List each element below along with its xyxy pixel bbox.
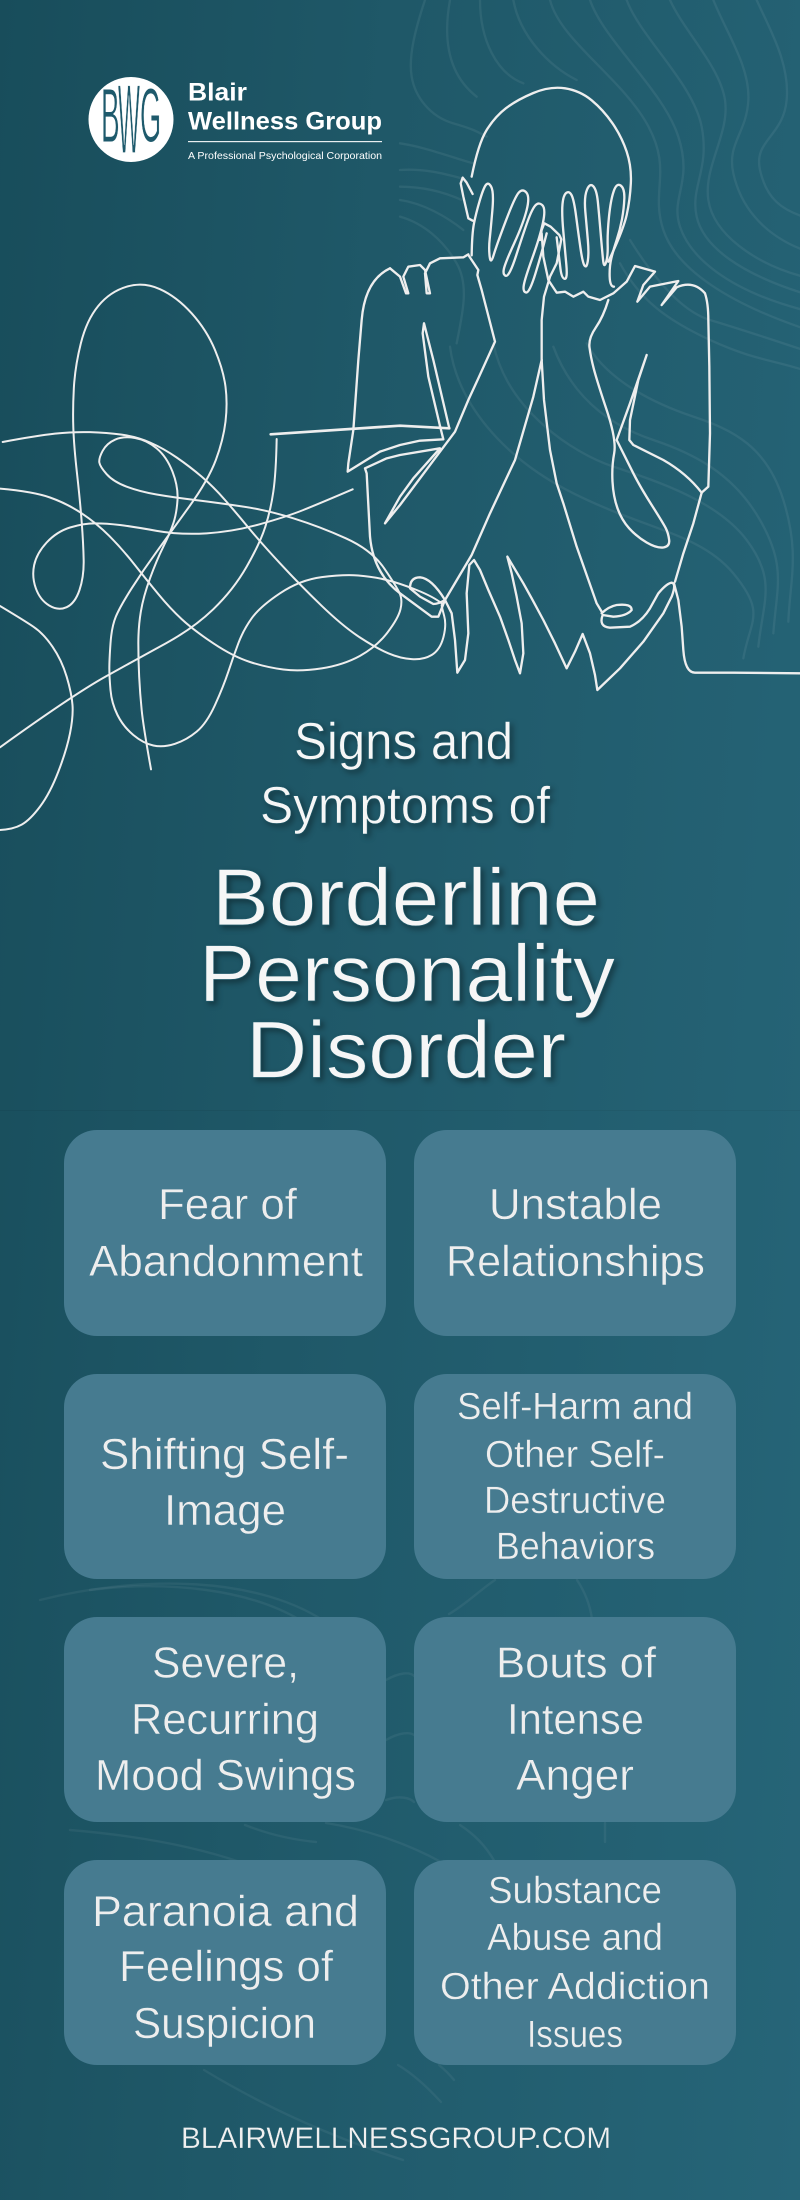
title: signs and symptoms of: [260, 713, 551, 835]
card: fear of abandonment: Fear of: [158, 1180, 298, 1229]
card: shifting self-image: Shifting Self-: [100, 1430, 349, 1479]
icon: BWG monogram: B: [101, 74, 120, 159]
card: severe recurring mood swings: [64, 1617, 386, 1822]
title: borderline personality disorder: Personality: [199, 929, 616, 1019]
card: fear of abandonment: Abandonment: [89, 1237, 363, 1286]
card: unstable relationships: [414, 1130, 736, 1336]
card: paranoia and feelings of suspicion: Feelings of: [119, 1942, 334, 1991]
card: substance abuse and other addiction issues: Issues: [527, 2014, 623, 2056]
card: unstable relationships: Unstable: [489, 1180, 662, 1229]
logo wordmark: Wellness Group: [188, 107, 382, 135]
title: borderline personality disorder: Borderline: [212, 853, 600, 943]
title: signs and symptoms of: Signs and: [294, 713, 513, 771]
card: paranoia and feelings of suspicion: [64, 1860, 386, 2065]
card: self-harm and other self-destructive behaviors: Destructive: [484, 1480, 666, 1522]
card: self-harm and other self-destructive behaviors: [414, 1374, 736, 1579]
title: borderline personality disorder: [199, 853, 616, 1096]
card: substance abuse and other addiction issues: [414, 1860, 736, 2065]
card: severe recurring mood swings: Recurring: [131, 1695, 319, 1744]
card: severe recurring mood swings: Mood Swings: [95, 1751, 356, 1800]
footer: website url: BLAIRWELLNESSGROUP.COM: [181, 2122, 611, 2155]
card: shifting self-image: Image: [164, 1486, 286, 1535]
card: substance abuse and other addiction issues: Other Addiction: [440, 1966, 710, 2008]
card: shifting self-image: [64, 1374, 386, 1579]
illustration: tangled line scribble: [0, 285, 445, 830]
card: bouts of intense anger: Anger: [516, 1751, 634, 1800]
title: signs and symptoms of: Symptoms of: [260, 777, 551, 835]
icon: BWG monogram: G: [140, 74, 161, 159]
card: fear of abandonment: [64, 1130, 386, 1336]
icon: BWG monogram: W: [118, 66, 140, 175]
card: self-harm and other self-destructive behaviors: Behaviors: [496, 1526, 655, 1568]
card: paranoia and feelings of suspicion: Suspicion: [133, 1999, 316, 2048]
background waves: top right: [400, 0, 800, 658]
card: bouts of intense anger: Intense: [507, 1695, 644, 1744]
card: bouts of intense anger: [414, 1617, 736, 1822]
card: paranoia and feelings of suspicion: Paranoia and: [92, 1887, 359, 1936]
logo tagline: A Professional Psychological Corporation: [188, 150, 382, 162]
logo wordmark: [188, 79, 382, 135]
card: substance abuse and other addiction issues: Abuse and: [487, 1917, 663, 1959]
illustration: distressed figure with head in hands: [271, 88, 800, 690]
card: bouts of intense anger: Bouts of: [496, 1638, 657, 1688]
background waves: bottom: [40, 1580, 605, 2160]
logo: Blair Wellness Group: [88, 66, 382, 175]
title: borderline personality disorder: Disorder: [246, 1006, 566, 1096]
card: self-harm and other self-destructive behaviors: Other Self-: [485, 1434, 665, 1476]
card: self-harm and other self-destructive behaviors: Self-Harm and: [457, 1386, 693, 1428]
icon: BWG monogram: [88, 66, 174, 175]
logo wordmark: Blair: [188, 79, 247, 107]
card: severe recurring mood swings: Severe,: [152, 1638, 299, 1688]
card: substance abuse and other addiction issues: Substance: [488, 1870, 662, 1912]
card: unstable relationships: Relationships: [446, 1237, 705, 1286]
